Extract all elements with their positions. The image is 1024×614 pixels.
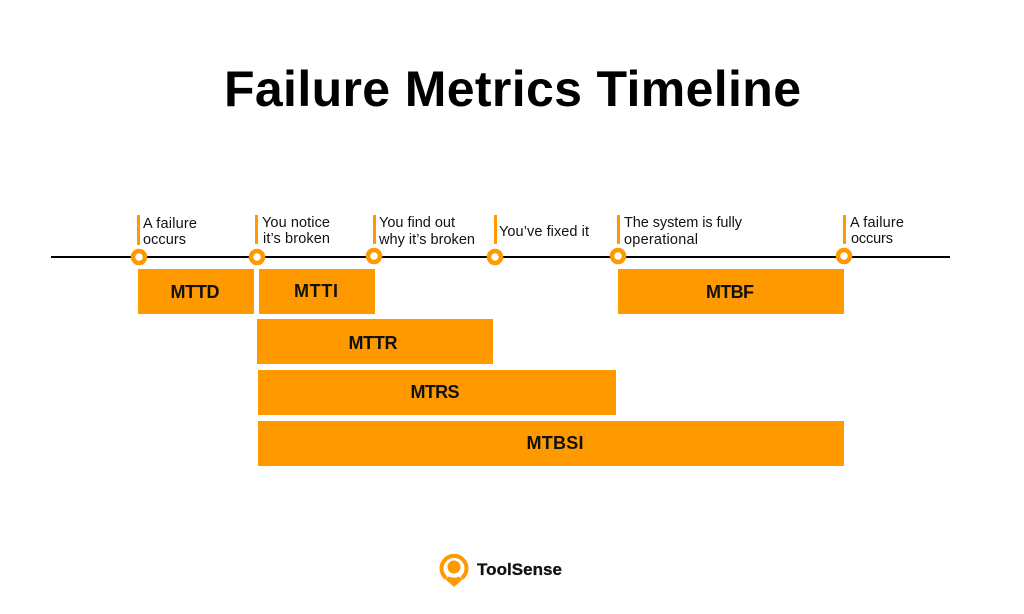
- event: a failure occurs again: A failure: [850, 215, 904, 231]
- bar: MTBSI: [258, 421, 844, 466]
- event: a failure occurs: occurs: [143, 232, 186, 248]
- event: you notice it's broken: You notice: [262, 215, 330, 231]
- timeline axis: [51, 256, 950, 258]
- event: the system is fully operational: [612, 215, 743, 262]
- bar: MTTD: MTTD: [170, 282, 220, 302]
- icon: location pin: [442, 556, 466, 587]
- event: you notice it's broken: it’s broken: [263, 231, 330, 247]
- event: a failure occurs again: [838, 215, 904, 262]
- event: you find out why it's broken: why it’s broken: [378, 232, 475, 248]
- bar: MTTI: MTTI: [294, 281, 338, 301]
- event: you've fixed it: [489, 215, 589, 263]
- event: you find out why it's broken: You find out: [379, 215, 455, 231]
- bar: MTTR: [257, 319, 493, 364]
- event: you've fixed it: You’ve fixed it: [499, 224, 589, 240]
- event: a failure occurs: A failure: [143, 216, 197, 232]
- logo: ToolSense: ToolSense: [477, 560, 562, 579]
- logo: ToolSense: [442, 556, 562, 587]
- bar: MTTI: [259, 269, 375, 314]
- bar: MTBF: [618, 269, 844, 314]
- bar: MTBF: MTBF: [706, 282, 754, 302]
- bar: MTTD: [138, 269, 254, 314]
- event: the system is fully operational: operational: [624, 232, 698, 248]
- title: Failure Metrics Timeline: [224, 61, 801, 117]
- event: a failure occurs again: occurs: [851, 231, 893, 247]
- event: the system is fully operational: The system is fully: [624, 215, 743, 231]
- bar: MTRS: MTRS: [410, 382, 460, 402]
- event: you find out why it's broken: [368, 215, 475, 262]
- bar: MTBSI: MTBSI: [526, 433, 584, 453]
- event: a failure occurs: [133, 215, 197, 263]
- bar: MTRS: [258, 370, 616, 415]
- event: you notice it's broken: [251, 215, 330, 263]
- bar: MTTR: MTTR: [348, 333, 398, 353]
